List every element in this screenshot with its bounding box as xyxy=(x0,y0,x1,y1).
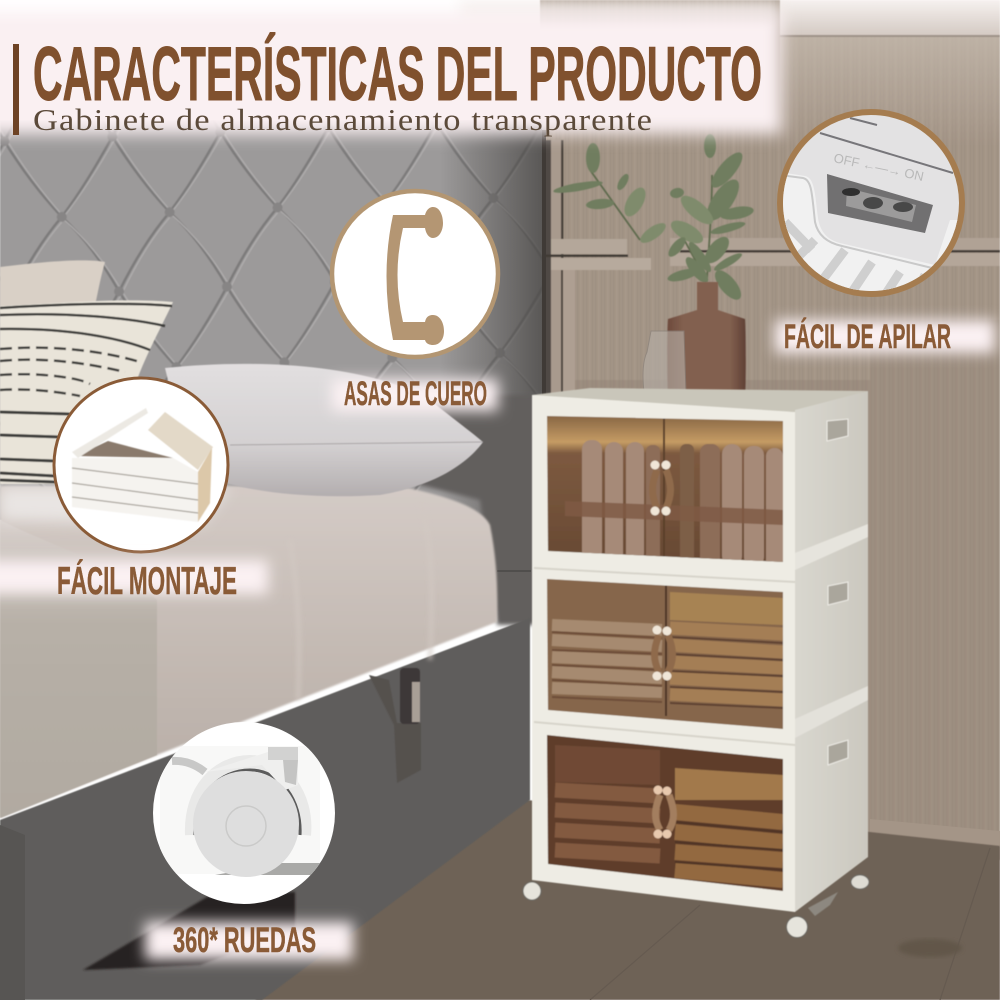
bottom drawer window xyxy=(546,734,784,892)
large plain pillow xyxy=(165,364,483,496)
cabinet side panel xyxy=(795,391,868,912)
duvet xyxy=(0,520,157,818)
sheet fold highlights xyxy=(290,500,432,700)
circle: leather handle xyxy=(332,191,498,357)
circle: easy assembly xyxy=(54,378,228,552)
headboard xyxy=(0,120,545,520)
circle: wheel xyxy=(153,722,335,904)
wood panel wall xyxy=(540,0,1000,860)
striped pillow xyxy=(0,300,173,484)
baseboard xyxy=(870,819,1000,846)
bed frame xyxy=(0,618,530,1000)
side handle 1 xyxy=(827,419,848,441)
shadow under frame xyxy=(83,892,295,970)
subtitle: Gabinete de almacenamiento transparente xyxy=(33,102,653,137)
label: 360 ruedas xyxy=(145,921,353,960)
glass vase xyxy=(667,282,746,398)
headboard side shadow xyxy=(440,120,542,520)
label: facil montaje xyxy=(0,559,268,603)
title background glow xyxy=(0,12,782,134)
side handle 3 xyxy=(828,740,848,765)
icon: folding box xyxy=(72,408,213,522)
label: facil montaje: FÁCIL MONTAJE xyxy=(57,559,237,603)
top pink fade band xyxy=(460,0,780,22)
frame left corner panel xyxy=(0,825,25,1000)
cabinet foot shadow xyxy=(808,892,838,916)
cabinet top surface xyxy=(532,388,868,412)
beige pillow xyxy=(0,260,105,312)
lock marking: OFF ←—→ ON xyxy=(832,150,925,184)
title accent bar xyxy=(13,44,19,135)
wheel front xyxy=(786,916,808,938)
front unit divisions xyxy=(534,568,795,745)
handle bottom drawer xyxy=(654,786,674,838)
handle top drawer xyxy=(650,460,670,516)
label: asas de cuero xyxy=(332,375,498,413)
cabinet front frame xyxy=(532,395,795,912)
sheet on mattress xyxy=(0,486,497,818)
white bed top xyxy=(0,487,230,525)
wood edge next to headboard xyxy=(542,130,546,400)
lower dark fabric at bed end xyxy=(400,395,542,625)
floor stain xyxy=(898,939,962,957)
floor xyxy=(255,800,1000,1000)
storage cabinet xyxy=(523,388,869,938)
circle: stacking lock xyxy=(770,112,965,310)
title block xyxy=(13,32,762,137)
drinking glass xyxy=(643,331,686,397)
handle middle drawer xyxy=(652,626,672,680)
bed end seam xyxy=(497,570,531,572)
side unit divisions xyxy=(795,524,868,570)
middle drawer window xyxy=(546,578,784,730)
plant leaves xyxy=(553,134,755,304)
side handle 2 xyxy=(828,582,848,605)
pocket on bed xyxy=(369,668,421,783)
icon: leather handle xyxy=(386,207,444,345)
label: asas de cuero: ASAS DE CUERO xyxy=(344,375,487,413)
label: 360 ruedas: 360* RUEDAS xyxy=(173,921,316,960)
floor plank lines xyxy=(590,848,990,1000)
plant and glassware xyxy=(553,134,755,398)
wheel rear xyxy=(851,875,869,889)
icon: caster wheel xyxy=(160,746,320,877)
door handles xyxy=(650,460,674,838)
wheel left xyxy=(523,882,541,900)
lock detail xyxy=(783,117,958,291)
top drawer window xyxy=(546,416,784,562)
